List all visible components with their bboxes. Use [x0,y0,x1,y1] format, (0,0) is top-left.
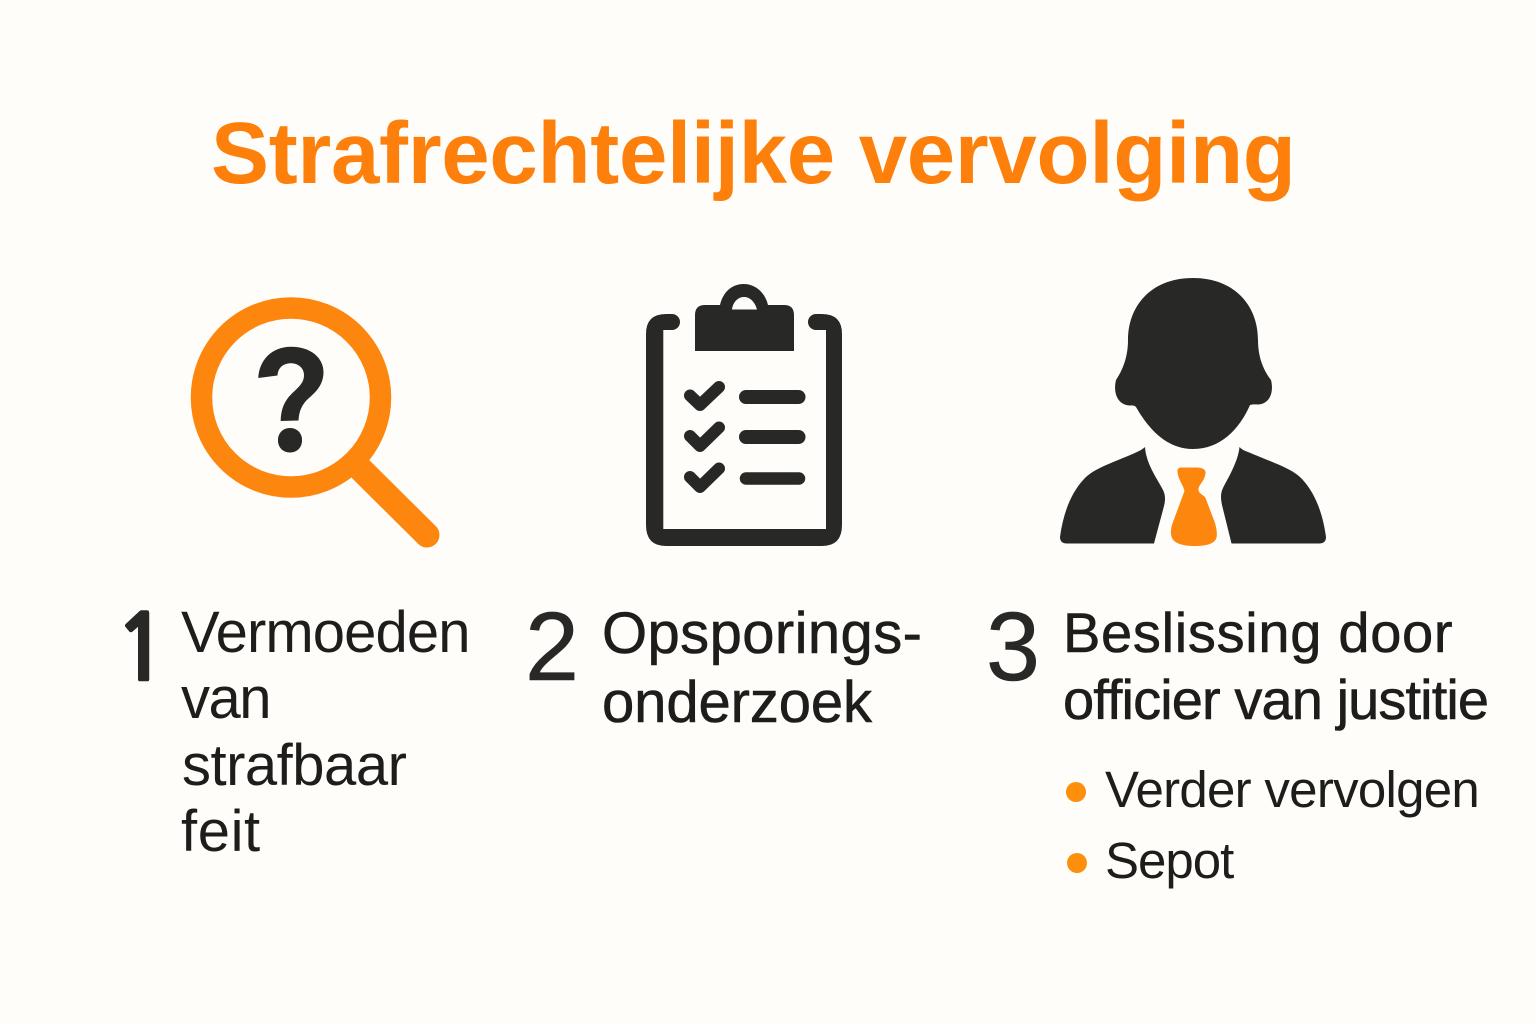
step 1 text: strafbaar [182,733,406,798]
step 2 text: onderzoek [602,670,872,735]
step 2 text: Opsporings- [602,601,922,666]
icon: officer of justice silhouette with orange tie [1060,278,1326,546]
bullet: sepot: Sepot [1105,832,1233,889]
step 1 text: van [181,666,270,731]
step 3 text [1063,601,1488,731]
step 1 text: feit [181,799,261,864]
bullet: verder vervolgen: Verder vervolgen [1105,761,1479,818]
step 3 text: Beslissing door [1063,601,1453,664]
title: Strafrechtelijke vervolging [211,105,1296,202]
step 1 text [181,600,470,864]
step 1 text: Vermoeden [181,600,470,665]
icon: clipboard with checklist [646,284,842,546]
step 3 text: officier van justitie [1063,668,1488,731]
icon: magnifying glass with question mark [190,297,440,548]
step 2 text [602,601,922,735]
step 2 number: 2 [525,592,579,701]
step 3 number: 3 [986,592,1040,701]
step 1 number: 1 [114,603,169,694]
bullet list [1066,761,1479,889]
